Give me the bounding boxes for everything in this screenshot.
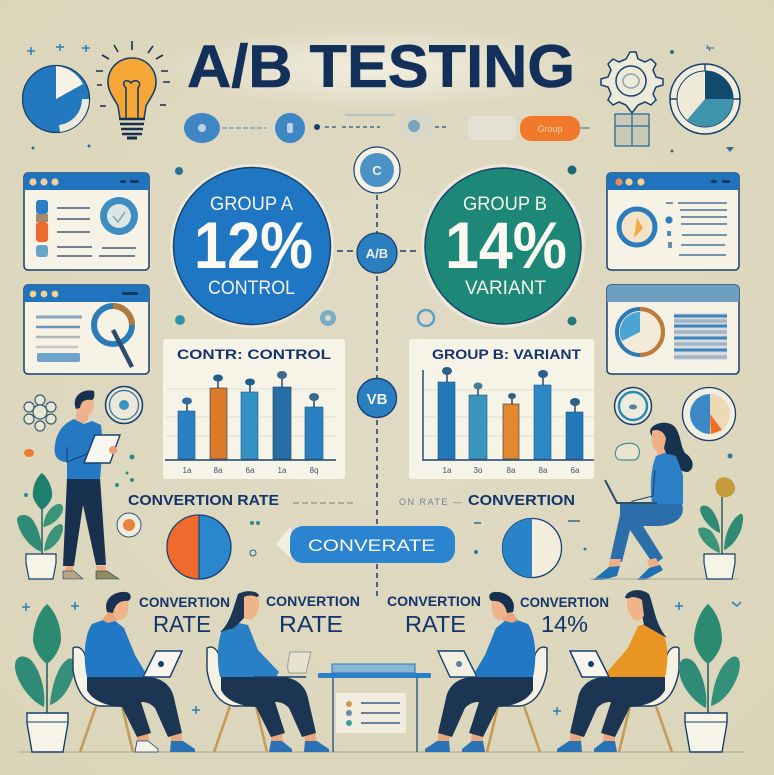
small accent icons around badges <box>175 166 576 326</box>
chair 1 <box>73 647 140 752</box>
group B value: 14% <box>445 208 567 282</box>
text: conversion 14%: 14% <box>541 611 588 637</box>
icon: sparkles top left <box>27 44 90 55</box>
title: A/B TESTING <box>187 33 575 100</box>
text: conversion rate 2: RATE <box>279 611 343 637</box>
icon: flower gear <box>24 395 56 431</box>
analyst tablet <box>84 435 120 463</box>
plant left small <box>17 473 63 579</box>
variant axis labels <box>443 466 580 475</box>
icon: pie chart right <box>682 388 736 440</box>
woman face 4 <box>627 597 644 621</box>
icon: ring pie top right <box>670 64 740 134</box>
variant bars <box>438 367 583 459</box>
control chart title: CONTR: CONTROL <box>177 346 332 362</box>
person: standing analyst with tablet <box>55 390 120 579</box>
pie chart control <box>167 515 231 579</box>
variant axis labels: 8a <box>539 466 548 475</box>
man torso 1 <box>85 620 145 677</box>
icon: center badge C: C <box>372 163 382 178</box>
analyst torso <box>55 419 102 479</box>
woman torso <box>651 453 683 504</box>
man legs 1 <box>87 677 183 743</box>
person: seated woman laptop <box>207 591 329 752</box>
woman shoes 4 <box>557 741 617 752</box>
plant bottom right <box>679 604 740 752</box>
icon: gear <box>601 52 663 113</box>
chair 3 <box>480 647 547 752</box>
control axis labels <box>183 466 318 475</box>
person: seated man laptop right <box>425 592 547 752</box>
man legs 3 <box>437 677 533 743</box>
title glow <box>155 26 605 110</box>
icon: pie chart top left <box>22 66 90 132</box>
panel: control bar chart <box>163 339 345 479</box>
man torso 3 <box>475 620 535 677</box>
woman torso 4 <box>607 623 667 677</box>
man hair 3 <box>489 592 514 613</box>
icon: orange dot <box>24 449 34 457</box>
variant chart title: GROUP B: VARIANT <box>432 346 581 362</box>
conversion label right: CONVERTION <box>468 492 575 509</box>
flow row connector <box>184 113 590 143</box>
icon: ring right <box>614 388 652 424</box>
plant right small <box>698 477 743 579</box>
small decorative marks top <box>32 45 734 175</box>
icon: center badge C <box>354 147 400 193</box>
control axis labels: 1a <box>183 466 192 475</box>
text: conversion rate 2: CONVERTION <box>266 594 360 609</box>
woman shoes 2 <box>269 741 329 752</box>
man face 1 <box>112 594 128 620</box>
man shoes 1 <box>135 741 158 752</box>
laptop 4 <box>570 651 609 677</box>
panel: variant bar chart <box>409 339 594 479</box>
woman hair <box>650 423 693 472</box>
laptop 2 <box>288 652 311 673</box>
chair 4 <box>612 647 679 752</box>
laptop 3 <box>438 651 477 677</box>
control axis labels: 8a <box>214 466 223 475</box>
VB badge <box>358 378 396 418</box>
small marks left <box>24 454 260 556</box>
man head 1 <box>102 612 122 623</box>
man shoe right 1 <box>170 741 195 752</box>
control axis labels: 8q <box>310 466 318 475</box>
center dashed axis <box>376 195 378 598</box>
text: conversion rate 3: RATE <box>405 611 466 637</box>
floor line <box>18 751 745 753</box>
text: conversion rate 3: CONVERTION <box>387 594 481 609</box>
pie chart variant <box>502 518 562 578</box>
analyst legs <box>63 478 106 566</box>
man neck 3 <box>498 612 518 623</box>
woman face 2 <box>244 596 259 620</box>
panel: browser window 4 <box>607 285 739 374</box>
variant axis labels: 3o <box>474 466 483 475</box>
laptop 1 <box>143 651 182 677</box>
conversion rate label left: CONVERTION RATE <box>128 492 279 509</box>
chair 2 <box>207 647 274 752</box>
flow row connector: Group <box>537 124 563 134</box>
woman legs 2 <box>221 677 317 743</box>
control axis labels: 1a <box>278 466 287 475</box>
variant axis labels: 6a <box>571 466 580 475</box>
group A label: GROUP A <box>210 194 293 215</box>
person: seated man laptop left <box>73 592 195 752</box>
woman arm <box>630 470 657 503</box>
panel: browser window 2 <box>24 285 149 374</box>
icon: outline cloud <box>615 443 639 460</box>
callout text: CONVERATE <box>308 536 435 555</box>
text: conversion 14% <box>520 595 609 637</box>
man hair 1 <box>106 592 131 613</box>
control label: CONTROL <box>208 278 295 299</box>
A/B link badge: A/B <box>366 246 388 261</box>
sparkles bottom <box>22 602 741 715</box>
group B badge <box>421 164 585 328</box>
woman legs <box>610 504 683 565</box>
callout pill <box>276 526 455 563</box>
person: seated woman orange sweater <box>557 590 679 752</box>
panel: browser window 3 <box>607 173 739 270</box>
person: woman with laptop <box>593 423 693 580</box>
plant bottom left <box>15 604 75 752</box>
small marks right <box>474 454 732 554</box>
variant label: VARIANT <box>465 278 546 299</box>
VB badge: VB <box>367 391 388 408</box>
text: conversion rate 1 <box>139 595 230 637</box>
group A value: 12% <box>194 208 313 282</box>
icon: light bulb <box>96 41 170 138</box>
control bars <box>178 371 323 459</box>
icon: ring left <box>106 386 142 424</box>
analyst head <box>76 408 90 424</box>
woman legs 4 <box>569 677 665 743</box>
man shoes 3 <box>425 741 485 752</box>
panel: browser window 1 <box>24 173 149 270</box>
woman laptop <box>605 480 657 503</box>
A/B link badge <box>337 233 420 273</box>
woman hair 2 <box>220 591 259 632</box>
text: conversion rate 1: RATE <box>153 611 211 637</box>
group A badge <box>170 164 334 328</box>
text: conversion 14%: CONVERTION <box>520 595 609 610</box>
man face 3 <box>492 594 508 620</box>
variant axis labels: 8a <box>507 466 516 475</box>
text: conversion rate 1: CONVERTION <box>139 595 230 610</box>
text: conversion rate 2 <box>266 594 360 637</box>
center table <box>318 664 431 752</box>
icon: small orange badge <box>117 513 141 537</box>
woman hair 4 <box>625 590 667 638</box>
icon: table grid <box>615 114 649 146</box>
woman torso 2 <box>218 622 279 677</box>
control axis labels: 6a <box>246 466 255 475</box>
group B label: GROUP B <box>463 194 547 215</box>
text: conversion rate 3 <box>387 594 481 637</box>
variant axis labels: 1a <box>443 466 452 475</box>
woman face <box>652 430 667 456</box>
connector label middle: ON RATE — <box>399 497 463 507</box>
floor line for woman <box>590 578 738 580</box>
